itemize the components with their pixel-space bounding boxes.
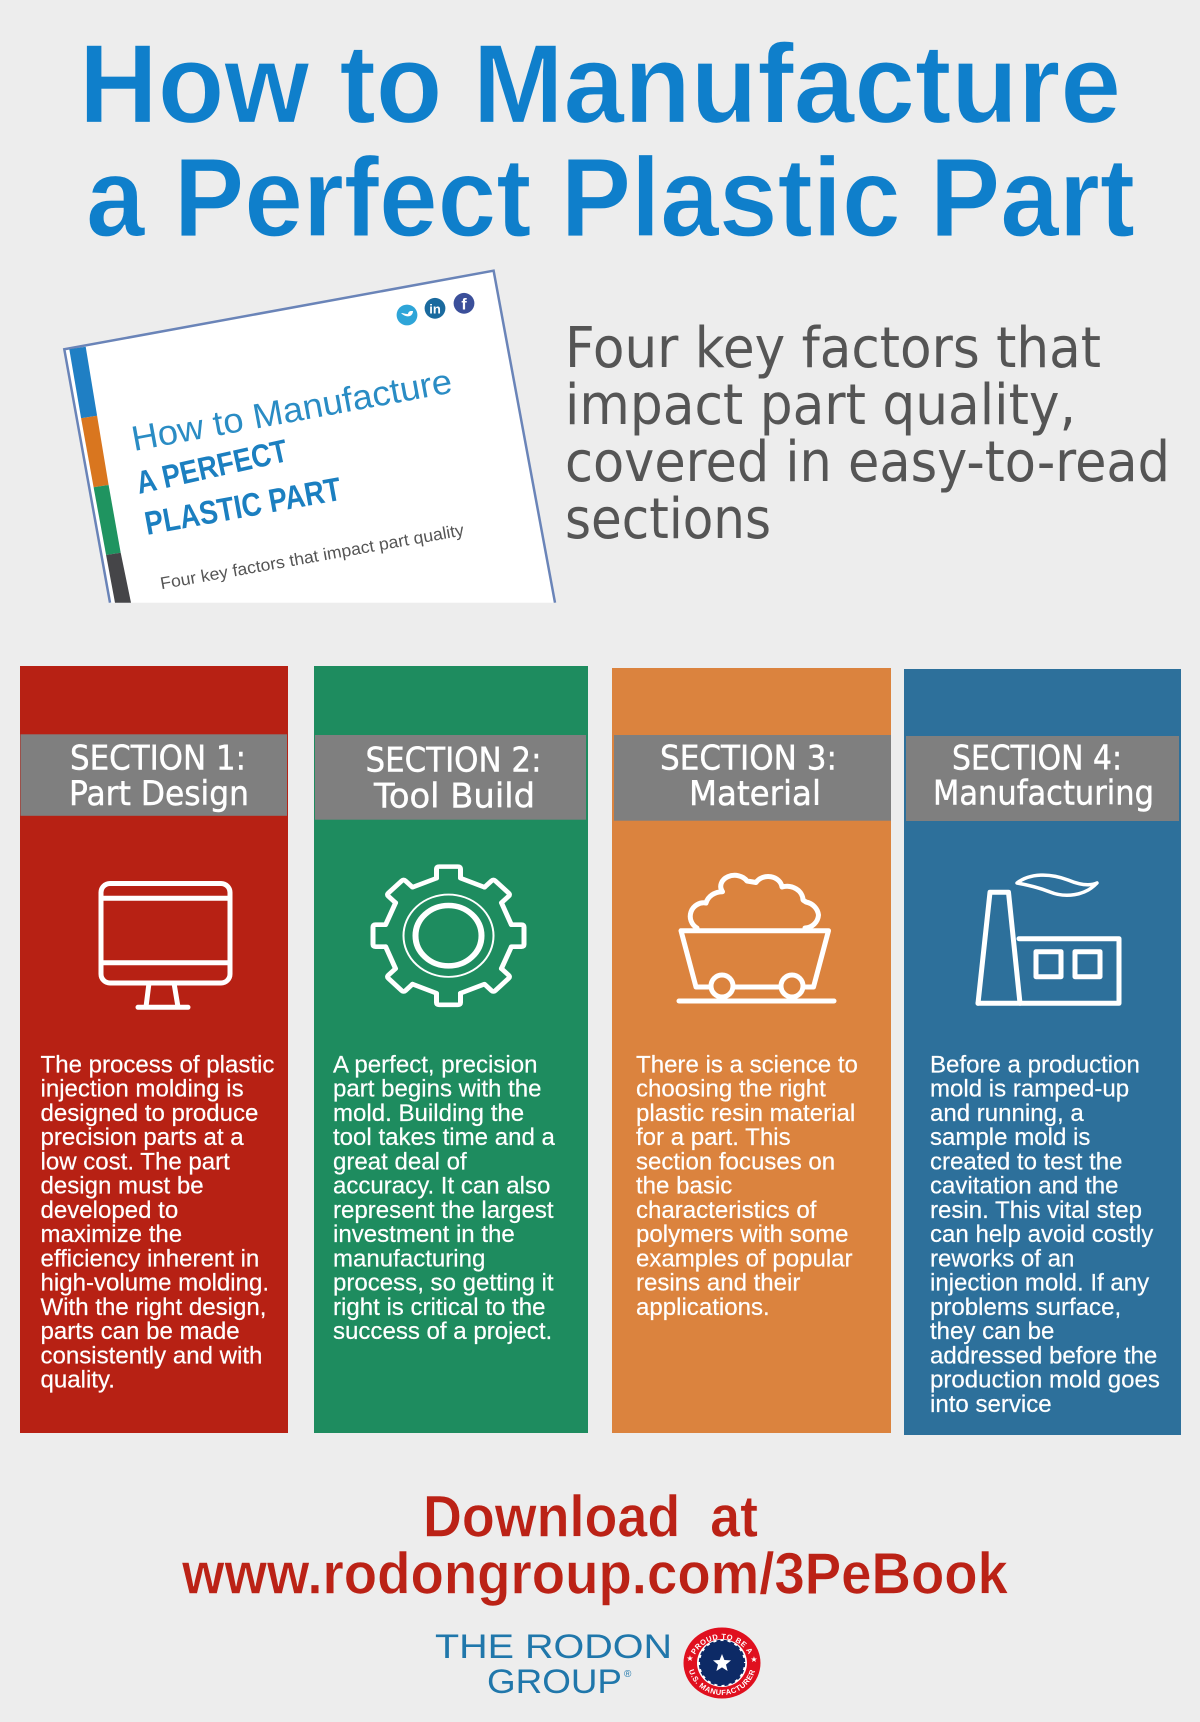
section 1 heading: Part Design	[69, 774, 249, 813]
panel: section 4 manufacturing	[904, 669, 1181, 1435]
badge: proud to be a U.S. manufacturer: U.S. MANUFACTURER	[689, 1669, 755, 1696]
panel: section 1 part design	[20, 666, 288, 1433]
section 1 text: designed to produce	[40, 1100, 258, 1127]
call to action: Download at	[423, 1485, 758, 1550]
subheading: impact part quality,	[565, 373, 1076, 438]
title: How to Manufacture	[79, 22, 1121, 147]
section 3 text: section focuses on	[636, 1148, 835, 1176]
section 2 text: investment in the	[333, 1221, 515, 1248]
section 1 text: design must be	[40, 1173, 204, 1200]
section 4 text: they can be	[930, 1318, 1054, 1345]
section 4 text: production mold goes	[930, 1367, 1160, 1394]
section 4 text: sample mold is	[930, 1124, 1090, 1151]
panel: section 2 tool build	[314, 666, 588, 1433]
title: a Perfect Plastic Part	[86, 135, 1135, 260]
section 3 text: applications.	[636, 1294, 770, 1321]
section 4 text: reworks of an	[930, 1245, 1074, 1272]
subheading: sections	[565, 487, 771, 552]
section 1 text: With the right design,	[40, 1294, 266, 1321]
section 3 text: resins and their	[636, 1270, 800, 1297]
section 3 heading: SECTION 3:	[660, 738, 837, 777]
logo: the rodon group	[435, 1628, 672, 1701]
icon: resin cart	[679, 875, 834, 1001]
section 1 text: parts can be made	[40, 1318, 240, 1345]
section 4 text: and running, a	[930, 1100, 1084, 1127]
section 1 text: maximize the	[40, 1221, 182, 1248]
section 1 text: precision parts at a	[40, 1124, 244, 1151]
badge: proud to be a U.S. manufacturer	[684, 1628, 760, 1698]
section 4 text: cavitation and the	[930, 1173, 1119, 1200]
subheading: Four key factors that	[565, 316, 1101, 381]
section 1 text: developed to	[40, 1197, 178, 1224]
section 4 text: Before a production	[930, 1052, 1140, 1078]
call to action: www.rodongroup.com/3PeBook	[181, 1541, 1009, 1606]
section 3 text: characteristics of	[636, 1197, 817, 1224]
section 1 text: quality.	[40, 1367, 115, 1394]
section 4 text: resin. This vital step	[930, 1197, 1142, 1224]
section 2 heading: SECTION 2:	[366, 741, 542, 780]
ebook cover image: PLASTIC PART	[142, 470, 344, 542]
icon: factory	[978, 875, 1119, 1003]
section 2 text: right is critical to the	[333, 1294, 546, 1321]
ebook cover image: A PERFECT	[133, 432, 291, 501]
section 1 text: low cost. The part	[40, 1148, 230, 1176]
section 1 text: injection molding is	[40, 1076, 244, 1103]
section 3 text: examples of popular	[636, 1245, 853, 1272]
ebook cover image: How to Manufacture	[128, 362, 455, 459]
section 1 text: efficiency inherent in	[40, 1245, 259, 1272]
logo: the rodon group: GROUP	[487, 1663, 622, 1701]
section 3 text: polymers with some	[636, 1221, 848, 1248]
section 4 heading	[906, 736, 1179, 821]
section 4 text: created to test the	[930, 1148, 1122, 1176]
section 1 heading: SECTION 1:	[70, 738, 246, 777]
section 4 text: injection mold. If any	[930, 1270, 1149, 1297]
section 4 text: problems surface,	[930, 1294, 1121, 1321]
section 2 text: part begins with the	[333, 1076, 542, 1103]
section 2 text: tool takes time and a	[333, 1124, 556, 1151]
section 4 text: into service	[930, 1391, 1052, 1418]
ebook cover image: Four key factors that impact part quality	[159, 520, 466, 593]
section 3 text: choosing the right	[636, 1076, 826, 1103]
section 3 text: There is a science to	[636, 1052, 858, 1078]
section 2 text: mold. Building the	[333, 1100, 524, 1127]
section 3 text: for a part. This	[636, 1124, 791, 1151]
section 4 text: can help avoid costly	[930, 1221, 1153, 1248]
section 2 text: success of a project.	[333, 1318, 552, 1345]
call to action	[181, 1485, 1009, 1606]
panel: section 3 material	[612, 668, 891, 1433]
ebook cover image	[64, 271, 555, 603]
section 1 text: The process of plastic	[40, 1052, 274, 1078]
section 1 heading	[20, 734, 287, 816]
logo: the rodon group: ®	[624, 1669, 632, 1680]
section 3 text: the basic	[636, 1173, 732, 1200]
section 3 heading: Material	[689, 774, 821, 813]
section 2 text: represent the largest	[333, 1197, 554, 1224]
icon: computer monitor	[101, 884, 230, 1007]
section 2 text: A perfect, precision	[333, 1052, 538, 1078]
section 2 text: accuracy. It can also	[333, 1173, 550, 1200]
section 4 heading: Manufacturing	[933, 774, 1154, 812]
section 1 text: high-volume molding.	[40, 1270, 269, 1297]
icon: social media: f	[461, 296, 467, 313]
badge: proud to be a U.S. manufacturer: ★	[750, 1655, 758, 1664]
section 3 text: plastic resin material	[636, 1100, 855, 1127]
section 2 text: great deal of	[333, 1148, 467, 1176]
section 4 text: addressed before the	[930, 1342, 1157, 1369]
section 2 heading	[315, 735, 586, 820]
section 1 text: consistently and with	[40, 1342, 262, 1369]
title	[79, 22, 1135, 260]
icon: social media	[397, 293, 474, 325]
section 4 heading: SECTION 4:	[952, 738, 1122, 777]
logo: the rodon group: THE RODON	[435, 1628, 672, 1666]
icon: gear	[370, 864, 527, 1008]
badge: proud to be a U.S. manufacturer: PROUD TO BE A	[690, 1634, 752, 1654]
subheading	[565, 316, 1170, 552]
section 2 heading: Tool Build	[373, 776, 535, 815]
section 3 heading	[614, 735, 891, 821]
section 2 text: manufacturing	[333, 1245, 485, 1272]
section 2 text: process, so getting it	[333, 1270, 554, 1297]
icon: social media: in	[429, 301, 441, 316]
badge: proud to be a U.S. manufacturer: ★	[686, 1654, 694, 1663]
section 4 text: mold is ramped-up	[930, 1076, 1129, 1103]
